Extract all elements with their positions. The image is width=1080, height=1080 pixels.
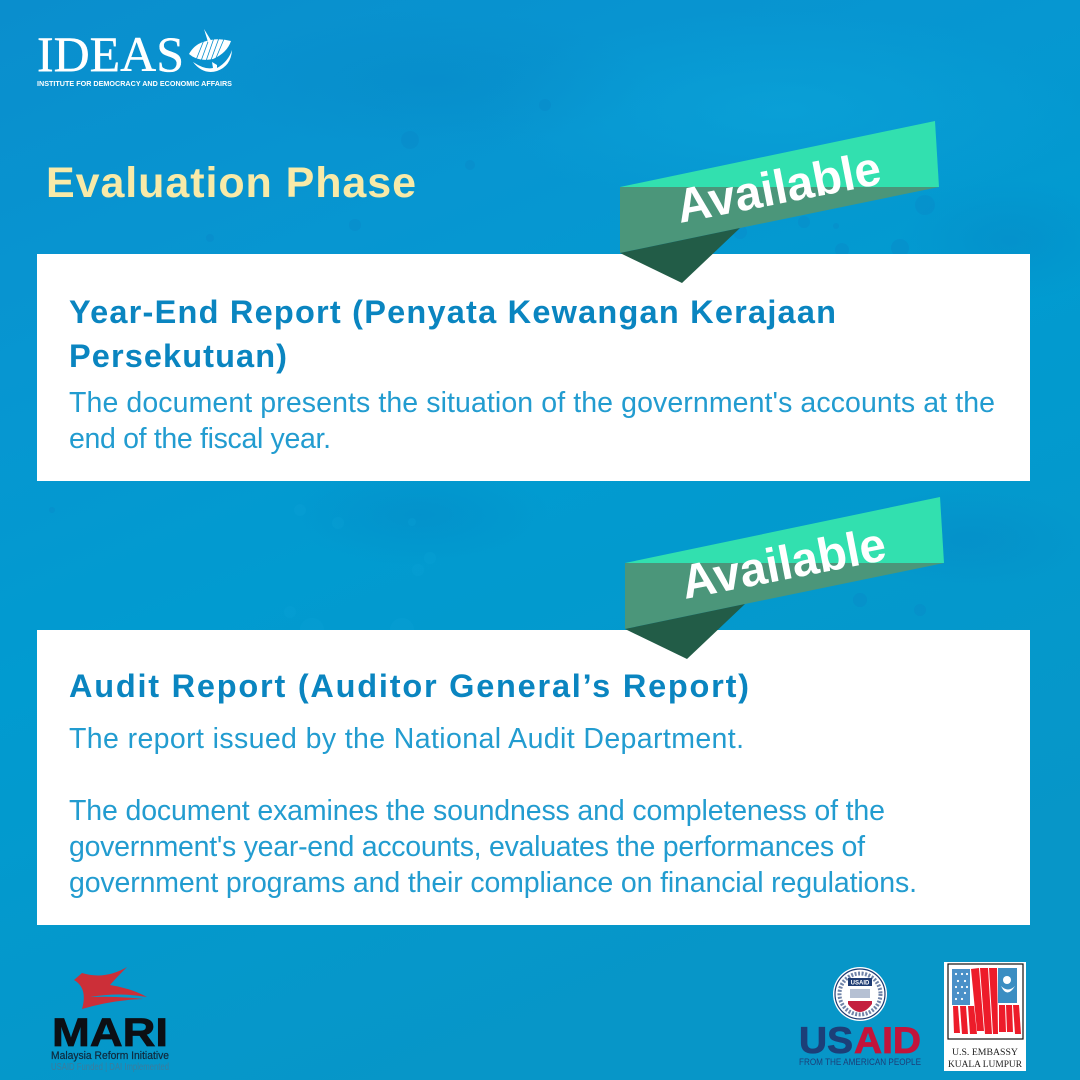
text: audit description: The document examines the soundness and completeness of the bbox=[69, 795, 885, 827]
icon: USAID seal: USAID bbox=[851, 980, 870, 986]
text: year-end description bbox=[69, 387, 995, 455]
logo: USAID: US bbox=[799, 1020, 853, 1061]
panel: year-end report bbox=[37, 254, 1030, 481]
logo: U.S. Embassy Kuala Lumpur bbox=[944, 962, 1026, 1071]
icon: red stripes bbox=[953, 968, 1021, 1034]
text: year-end description: end of the fiscal year. bbox=[69, 423, 331, 455]
logo: USAID bbox=[799, 967, 921, 1068]
logo: MARI: USAID Funded | DAI Implemented bbox=[51, 1062, 169, 1073]
icon: stars canton bbox=[952, 969, 970, 1005]
icon: red flag bbox=[74, 967, 147, 1009]
logo: MARI bbox=[51, 967, 169, 1073]
logo: IDEAS: IDEAS bbox=[37, 26, 184, 82]
heading: year-end report: Persekutuan) bbox=[69, 338, 287, 374]
text: year-end description: The document presents the situation of the government's accounts at the bbox=[69, 387, 995, 419]
panel: audit report bbox=[37, 630, 1030, 925]
text: audit source: The report issued by the National Audit Department. bbox=[69, 723, 744, 755]
logo: IDEAS bbox=[37, 26, 232, 88]
text: audit description: government's year-end accounts, evaluates the performances of bbox=[69, 831, 865, 863]
ribbon: available 2 bbox=[625, 497, 944, 659]
text: audit description: government programs and their compliance on financial regulations. bbox=[69, 867, 917, 899]
ribbon: available 2: Available bbox=[677, 518, 890, 610]
logo: USAID: FROM THE AMERICAN PEOPLE bbox=[799, 1057, 921, 1068]
logo: U.S. Embassy Kuala Lumpur: U.S. EMBASSY bbox=[952, 1048, 1018, 1058]
icon: crescent canton bbox=[998, 968, 1017, 1003]
ribbon: available 1: Available bbox=[672, 142, 885, 234]
logo: U.S. Embassy Kuala Lumpur: KUALA LUMPUR bbox=[948, 1060, 1023, 1070]
logo: IDEAS: INSTITUTE FOR DEMOCRACY AND ECONOMIC AFFAIRS bbox=[37, 81, 232, 88]
heading: year-end report: Year-End Report (Penyata Kewangan Kerajaan bbox=[69, 294, 836, 330]
ribbon: available 1 bbox=[620, 121, 939, 283]
logo: USAID: AID bbox=[854, 1020, 921, 1061]
heading: audit report: Audit Report (Auditor General’s Report) bbox=[69, 668, 749, 704]
heading: year-end report bbox=[69, 294, 836, 374]
title: Evaluation Phase bbox=[46, 159, 416, 207]
text: audit description bbox=[69, 795, 917, 899]
icon: IDEAS emblem bbox=[189, 29, 232, 72]
logo: MARI: MARI bbox=[52, 1011, 168, 1055]
logo: MARI: Malaysia Reform Initiative bbox=[51, 1050, 169, 1062]
